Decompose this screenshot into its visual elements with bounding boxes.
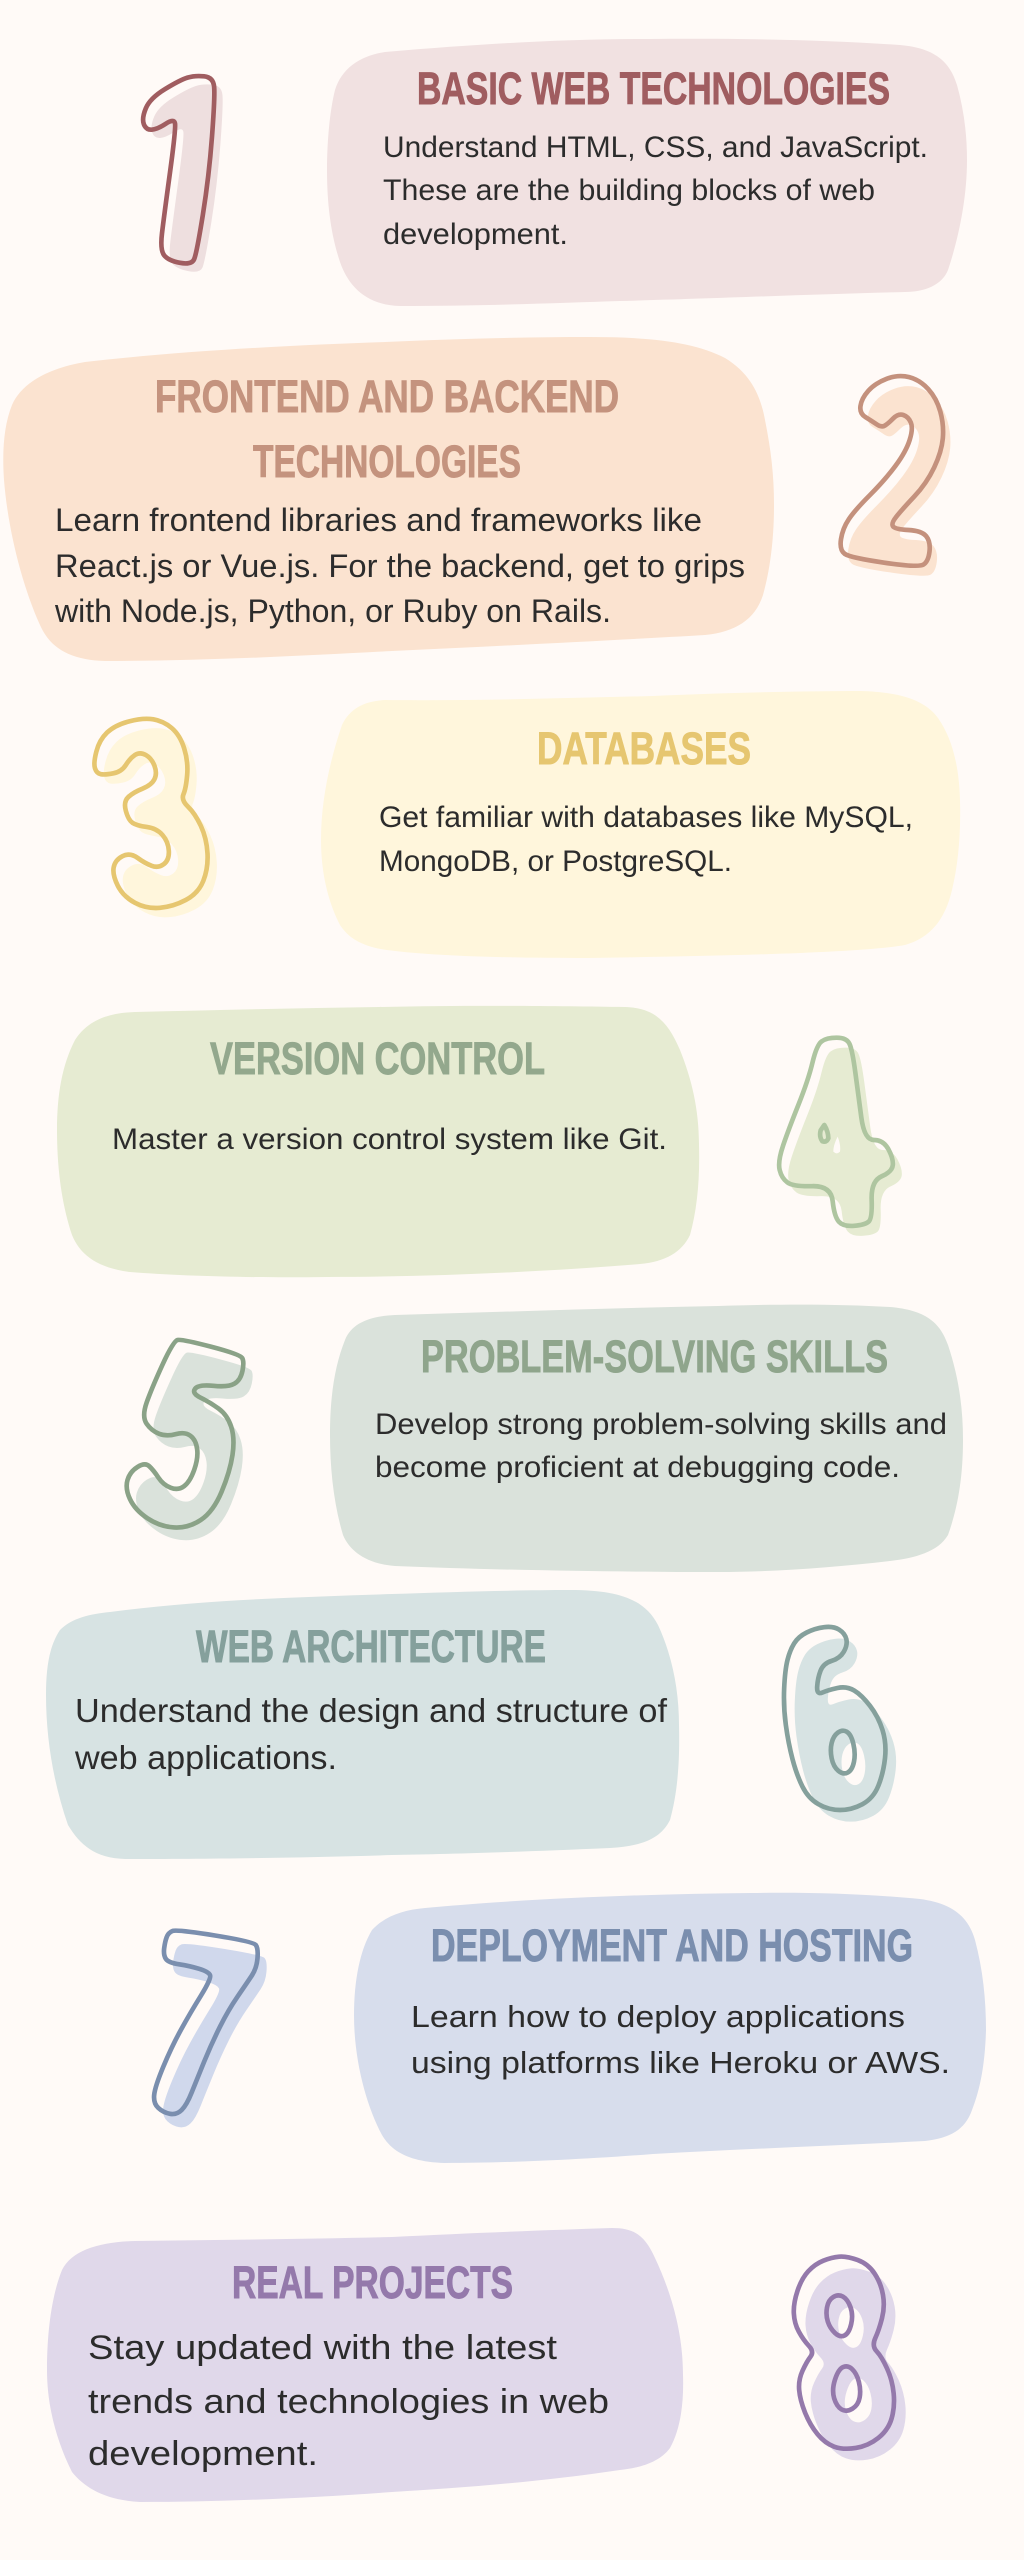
body text: web applications. <box>74 1739 337 1776</box>
body text: Master a version control system like Git. <box>112 1123 667 1156</box>
body text <box>379 801 913 878</box>
body text <box>54 502 745 629</box>
panel: step 1 basic web technologies <box>327 39 967 306</box>
icon: number 4 <box>779 1038 902 1236</box>
body text: Get familiar with databases like MySQL, <box>379 801 913 834</box>
body text: Learn how to deploy applications <box>411 1999 905 2034</box>
heading: REAL PROJECTS <box>232 2257 513 2308</box>
card background <box>57 1006 699 1277</box>
card background <box>321 691 960 958</box>
card background <box>47 2228 683 2502</box>
body text: development. <box>88 2435 318 2473</box>
body text: using platforms like Heroku or AWS. <box>411 2045 950 2080</box>
heading: WEB ARCHITECTURE <box>196 1621 546 1672</box>
body text: trends and technologies in web <box>88 2383 609 2421</box>
icon: number 2 <box>841 376 950 576</box>
card background <box>327 39 967 306</box>
panel: step 3 databases <box>321 691 960 958</box>
icon: number 8 <box>794 2257 906 2460</box>
card background <box>354 1893 986 2163</box>
body text: Understand HTML, CSS, and JavaScript. <box>383 131 928 164</box>
heading: TECHNOLOGIES <box>253 436 521 487</box>
body text: Learn frontend libraries and frameworks like <box>55 502 702 538</box>
body text: Understand the design and structure of <box>75 1692 668 1729</box>
panel: step 5 problem-solving skills <box>330 1305 963 1572</box>
icon: number 6 <box>784 1627 896 1822</box>
body text: development. <box>383 218 568 251</box>
body text <box>74 1692 668 1776</box>
icon: number 7 <box>154 1931 267 2127</box>
body text <box>383 131 928 251</box>
heading: PROBLEM-SOLVING SKILLS <box>421 1331 888 1382</box>
body text: become proficient at debugging code. <box>375 1451 900 1484</box>
card background <box>46 1590 679 1859</box>
heading: FRONTEND AND BACKEND <box>155 371 619 422</box>
body text: Stay updated with the latest <box>88 2329 558 2367</box>
icon: number 3 <box>94 719 217 917</box>
body text: These are the building blocks of web <box>383 174 875 207</box>
body text <box>375 1408 947 1484</box>
panel: step 7 deployment and hosting <box>354 1893 986 2163</box>
icon: number 5 <box>127 1340 253 1540</box>
body text: Develop strong problem-solving skills and <box>375 1408 947 1441</box>
body text: MongoDB, or PostgreSQL. <box>379 845 732 878</box>
panel: step 6 web architecture <box>46 1590 679 1859</box>
body text: React.js or Vue.js. For the backend, get to grips <box>55 548 745 584</box>
panel: step 2 frontend and backend technologies <box>3 337 774 661</box>
card background <box>330 1305 963 1572</box>
panel: step 4 version control <box>57 1006 699 1277</box>
icon: number 1 <box>143 76 223 272</box>
card background <box>3 337 774 661</box>
heading: DATABASES <box>537 723 751 774</box>
heading: VERSION CONTROL <box>210 1033 545 1084</box>
body text <box>411 1999 950 2080</box>
heading <box>155 371 619 487</box>
panel: step 8 real projects <box>47 2228 683 2502</box>
body text: with Node.js, Python, or Ruby on Rails. <box>54 593 611 629</box>
body text <box>88 2329 609 2473</box>
